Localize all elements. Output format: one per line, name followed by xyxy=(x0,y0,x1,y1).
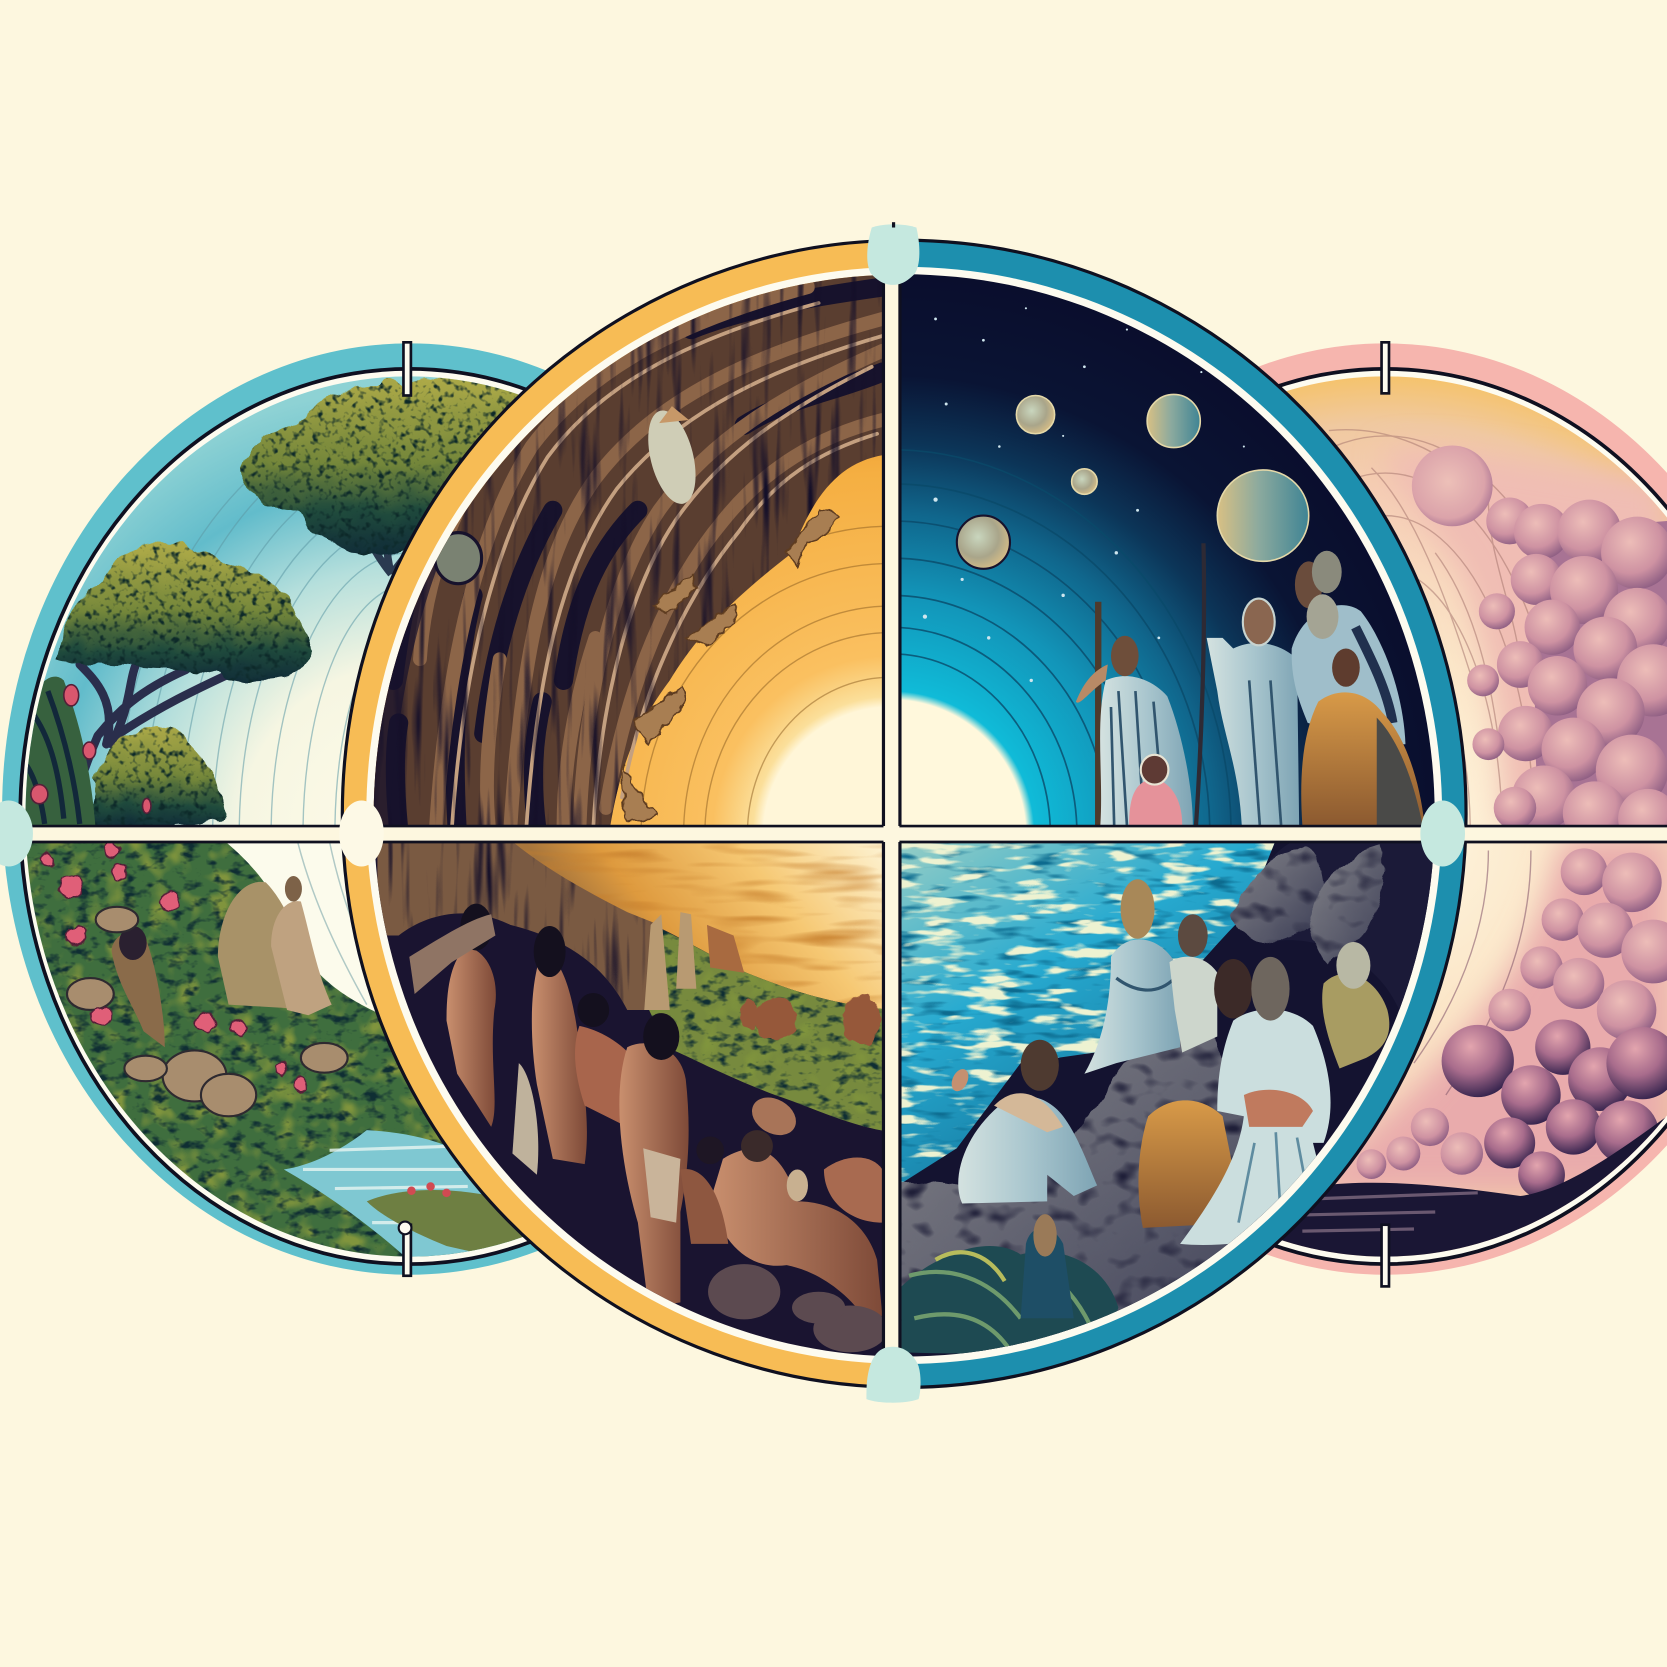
main man xyxy=(619,1013,689,1308)
central circle xyxy=(0,213,1667,1425)
dark root shadows xyxy=(393,287,882,829)
pale sky remnant xyxy=(0,840,595,1286)
quadrant: roots and sun xyxy=(319,213,1173,1143)
green hillside xyxy=(27,842,522,1257)
root creatures xyxy=(622,508,838,821)
infographic illustration xyxy=(0,222,1667,1403)
child in pink xyxy=(1129,755,1182,825)
right circle white ring xyxy=(996,369,1667,1264)
left circle bottom pin xyxy=(399,1222,411,1276)
companion figure xyxy=(1169,914,1217,1053)
right circle top pin xyxy=(1382,342,1389,393)
small float xyxy=(948,1066,972,1094)
figure in orange xyxy=(1301,649,1425,825)
quadrant: sea and prophets xyxy=(893,840,1488,1414)
lower clouds xyxy=(1282,843,1667,1257)
sea xyxy=(893,840,1276,1183)
green hill xyxy=(622,912,893,1132)
dark base xyxy=(893,840,1488,1414)
seated robed figure xyxy=(1084,879,1180,1074)
peach sky xyxy=(1286,376,1667,825)
kneeling figure xyxy=(958,1040,1097,1203)
upper tree canopy xyxy=(240,373,542,553)
top connector tick xyxy=(892,222,895,228)
main robed figure xyxy=(1180,957,1334,1245)
sky arcs xyxy=(124,483,402,825)
lower bush xyxy=(94,725,225,829)
horizontal divider xyxy=(0,826,1667,842)
white inner ring xyxy=(366,267,1442,1364)
mid brown roots xyxy=(420,282,882,829)
left circle white ring xyxy=(20,369,798,1264)
moon in roots xyxy=(435,533,482,584)
water highlights xyxy=(1292,1193,1478,1231)
crouching figure xyxy=(575,993,649,1127)
right circle bottom pin xyxy=(1382,1225,1389,1286)
river xyxy=(284,1130,522,1257)
boulders xyxy=(67,907,348,1116)
circle: left garden xyxy=(2,341,546,1278)
rock lump top xyxy=(1246,842,1488,1021)
vertical divider xyxy=(883,279,900,1354)
stars xyxy=(923,307,1245,682)
pale carved figure xyxy=(640,406,704,509)
flowers on hillside xyxy=(39,843,306,1091)
group behind xyxy=(1292,551,1405,744)
sun rings xyxy=(609,526,1173,1143)
left bank strokes xyxy=(27,691,80,824)
orbit rings xyxy=(551,450,1231,1219)
seated figure xyxy=(112,926,165,1047)
cream cross backing xyxy=(319,213,1488,1425)
band: orange half xyxy=(342,240,1466,1387)
sky xyxy=(26,376,518,825)
distant crowds xyxy=(741,995,880,1046)
pink wash xyxy=(1382,448,1667,826)
hidden face figure xyxy=(1021,1214,1074,1318)
circle: right clouds xyxy=(1258,341,1667,1288)
sun gradient xyxy=(319,213,893,840)
root mass with grain xyxy=(361,266,883,840)
left connector xyxy=(339,801,384,866)
rim shadow xyxy=(361,266,734,840)
quadrant: people and sand xyxy=(319,840,893,1403)
right circle picture xyxy=(1282,376,1667,1257)
islet xyxy=(366,1182,522,1252)
band: teal half xyxy=(342,240,1466,1387)
cliff and standing figure xyxy=(218,876,332,1015)
left bank foliage xyxy=(21,677,96,829)
figure with staff xyxy=(1076,636,1193,825)
seated group xyxy=(680,1090,882,1316)
mauve cluster backing xyxy=(1535,521,1667,826)
far left connector xyxy=(0,801,33,866)
staff two xyxy=(1196,543,1204,825)
dark base xyxy=(319,840,893,1403)
lower cloud lines xyxy=(1414,850,1532,1096)
lower scene: hillside and river xyxy=(27,842,523,1257)
standing stones xyxy=(644,912,744,1010)
faint arcs xyxy=(1328,429,1532,825)
right connector xyxy=(1420,801,1465,866)
sand xyxy=(510,840,893,1010)
left circle teal band xyxy=(2,343,816,1275)
figure long hair xyxy=(512,926,587,1175)
planets xyxy=(957,394,1309,569)
left tree trunk xyxy=(76,662,227,771)
upper cloud bubbles xyxy=(1467,498,1667,848)
flowers xyxy=(31,685,151,813)
space gradient xyxy=(891,213,1497,840)
figure with raised arms xyxy=(409,904,496,1127)
pale lump xyxy=(1412,445,1493,526)
foreground rocks xyxy=(708,1264,888,1352)
pink wash lower xyxy=(1302,840,1667,1191)
river ripples xyxy=(303,1146,468,1223)
top connector xyxy=(867,224,919,285)
bottom connector xyxy=(866,1347,921,1403)
upper clouds xyxy=(1286,376,1667,825)
dark water xyxy=(1270,1116,1667,1286)
orange robed figure xyxy=(1138,1100,1244,1228)
root base xyxy=(361,266,883,840)
picture disc xyxy=(319,213,1497,1425)
right circle pink band xyxy=(978,343,1667,1275)
sky lines xyxy=(297,843,368,1005)
peach sky lower xyxy=(1282,843,1667,1257)
upper scene: sky and trees xyxy=(26,376,518,825)
left tree canopy xyxy=(55,543,315,680)
left circle top pin xyxy=(403,342,411,395)
figure raising staff xyxy=(1207,599,1299,825)
left circle picture xyxy=(26,376,523,1257)
bearded head behind xyxy=(1214,959,1252,1018)
upper tree trunk xyxy=(372,553,401,576)
light root highlights xyxy=(452,303,882,829)
staff one xyxy=(1095,602,1101,825)
shawled figure right xyxy=(1322,942,1389,1068)
lower cloud bubbles xyxy=(1357,848,1667,1179)
quadrant: cosmos xyxy=(551,213,1497,1219)
rock outcrops xyxy=(899,845,1385,1350)
brown columns xyxy=(377,840,659,1010)
dark cloud bubbles xyxy=(1442,1020,1667,1198)
ferns xyxy=(902,1246,1118,1353)
